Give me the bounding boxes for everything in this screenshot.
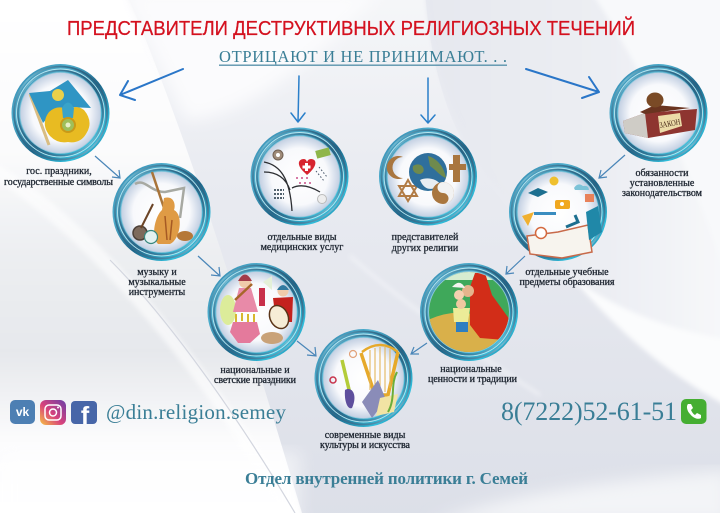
panel: traditions — [420, 263, 518, 361]
arrow: to religions — [421, 78, 435, 123]
panel: culture — [314, 329, 412, 427]
caption: other religions: представителей — [392, 232, 459, 243]
subtitle: ОТРИЦАЮТ И НЕ ПРИНИМАЮТ. . . — [219, 47, 507, 66]
caption: traditions: национальные — [440, 364, 502, 375]
arrow: music to holidays — [198, 256, 220, 276]
caption: education: предметы образования — [520, 277, 615, 288]
caption: other religions: других религии — [392, 243, 459, 254]
arrow: to symbols — [120, 69, 183, 100]
caption: state symbols: государственные символы — [4, 177, 113, 188]
title: ПРЕДСТАВИТЕЛИ ДЕСТРУКТИВНЫХ РЕЛИГИОЗНЫХ ТЕЧЕНИЙ — [67, 16, 635, 40]
arrow: to law — [526, 69, 599, 98]
caption: music: музыкальные — [128, 277, 186, 288]
arrow: law to education — [599, 155, 625, 178]
icon: vk: vk — [16, 405, 29, 419]
caption: music: музыку и — [137, 267, 177, 278]
icon: instagram — [40, 400, 66, 425]
arrow: holidays to culture — [297, 341, 316, 356]
arrow: traditions to culture — [411, 343, 427, 354]
caption: law: обязанности — [636, 168, 689, 179]
arrow: symbols to music — [95, 156, 120, 178]
panel: other religions — [379, 128, 477, 226]
icon: facebook — [71, 401, 97, 430]
footer: Отдел внутренней политики г. Семей — [245, 469, 528, 488]
arrow: to medicine — [291, 76, 305, 122]
panel: medical services — [250, 128, 348, 226]
caption: education: отдельные учебные — [525, 267, 609, 278]
social handle: @din.religion.semey — [106, 400, 286, 424]
caption: holidays: национальные и — [220, 365, 290, 376]
phone number: 8(7222)52-61-51 — [501, 397, 677, 426]
icon: vk — [10, 400, 35, 424]
panel: holidays — [208, 263, 306, 361]
caption: law: установленные — [630, 178, 695, 189]
panel: law — [610, 64, 708, 162]
caption: state symbols: гос. праздники, — [26, 166, 92, 177]
panel: music — [112, 163, 210, 261]
caption: holidays: светские праздники — [214, 375, 297, 386]
caption: traditions: ценности и традиции — [428, 374, 518, 385]
panel: law: ЗАКОН — [659, 116, 681, 130]
caption: medical services: отдельные виды — [267, 232, 337, 243]
icon: phone — [681, 399, 706, 424]
panel: education — [509, 163, 607, 261]
arrow: education to traditions — [506, 256, 525, 274]
caption: medical services: медицинских услуг — [261, 242, 343, 253]
caption: music: инструменты — [129, 287, 186, 298]
panel: state symbols — [12, 64, 110, 162]
icon: facebook: f — [81, 402, 90, 430]
caption: law: законодательством — [622, 188, 703, 199]
caption: culture: культуры и искусства — [320, 440, 411, 451]
caption: culture: современные виды — [325, 430, 406, 441]
